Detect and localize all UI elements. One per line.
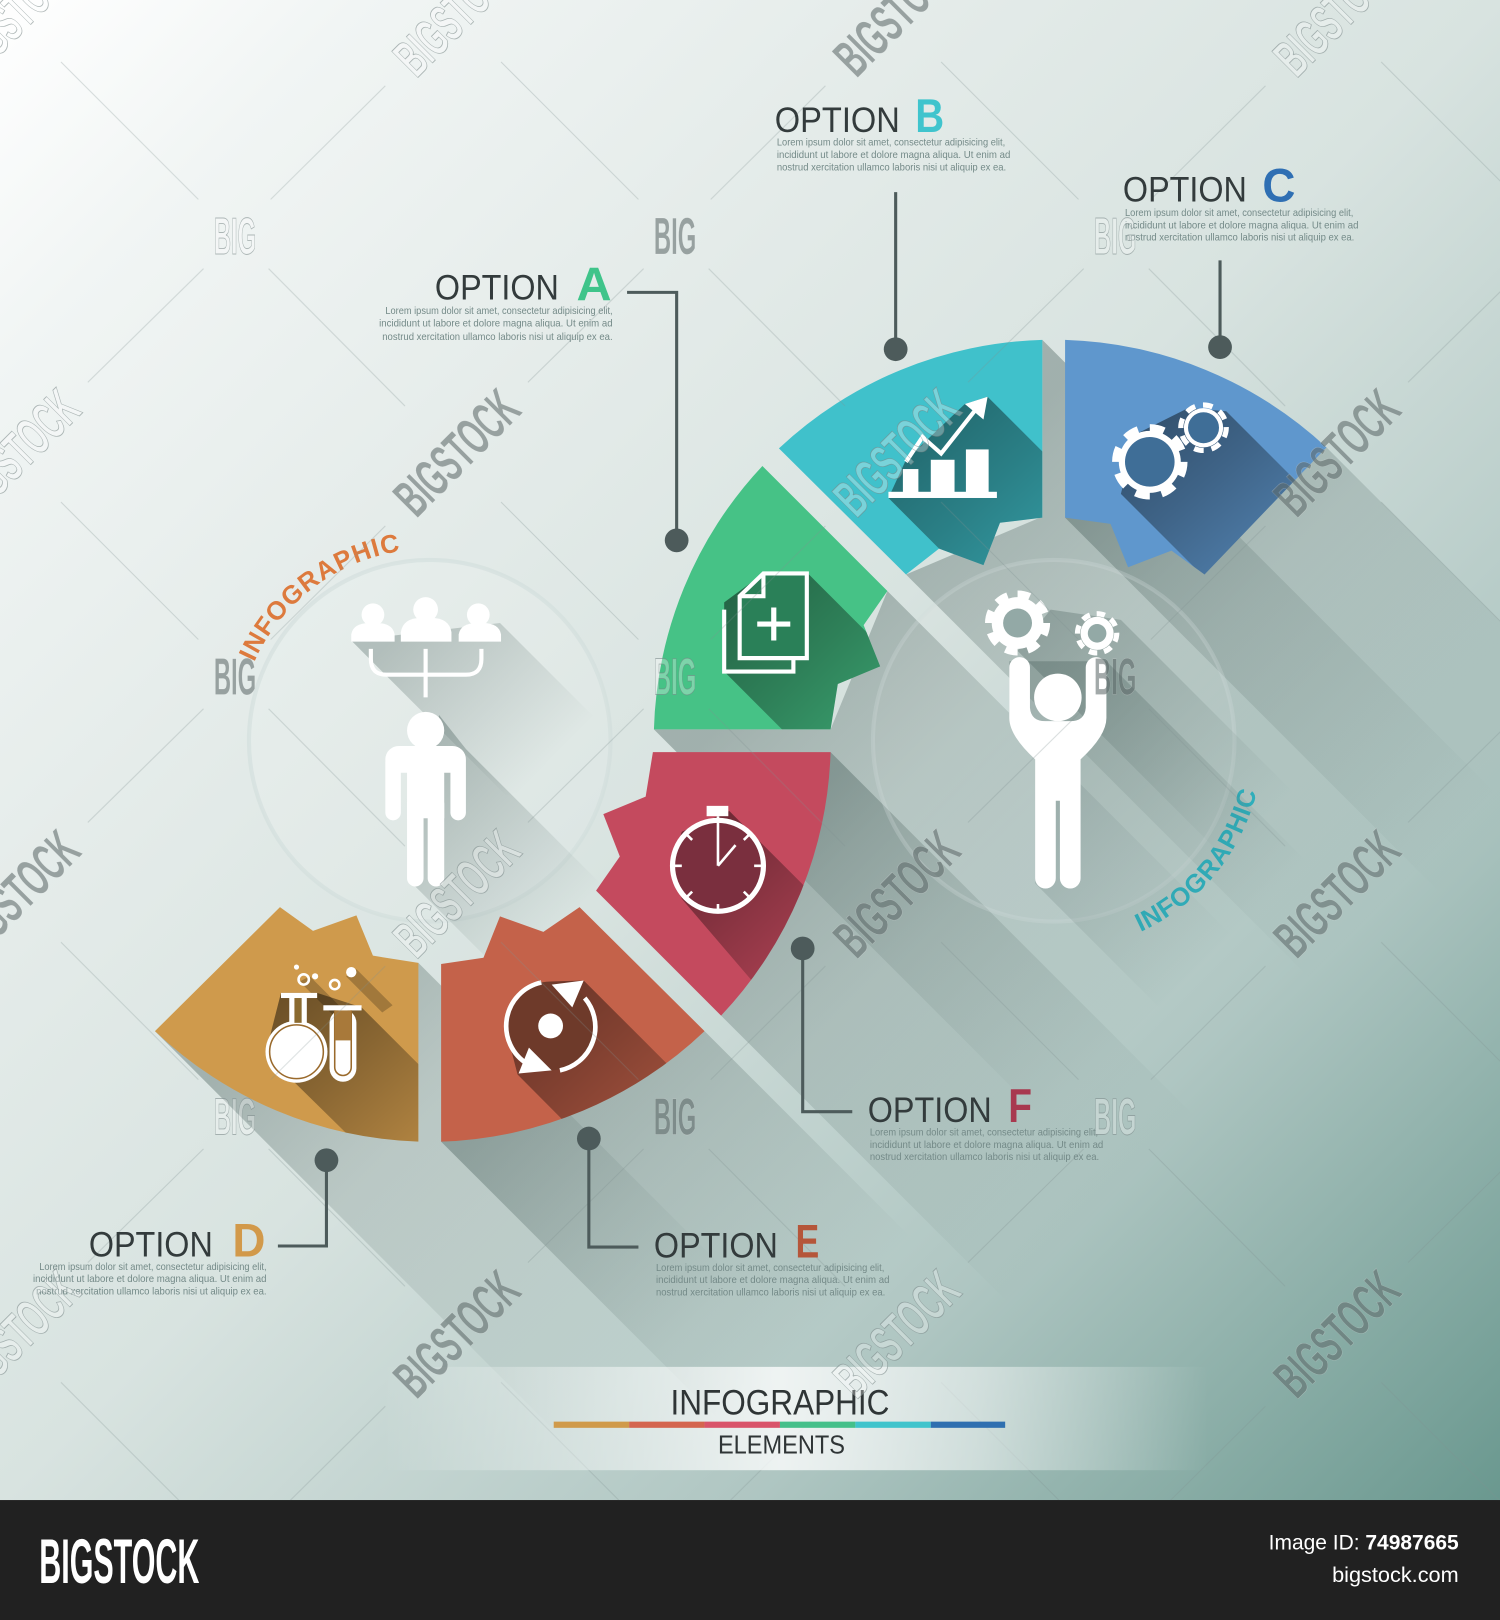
text block: option E: incididunt ut labore et dolore magna aliqua. Ut enim ad bbox=[656, 1275, 889, 1286]
small watermarks: BIG bbox=[214, 1087, 256, 1145]
text block: option B bbox=[775, 90, 1010, 173]
text block: option D bbox=[33, 1214, 267, 1298]
footer bar: bigstock.com bbox=[1332, 1562, 1459, 1587]
watermarks: BIGSTOCK bbox=[1263, 819, 1412, 969]
footer bar bbox=[0, 1500, 1500, 1620]
curved label: right infographic: INFOGRAPHIC bbox=[1134, 789, 1256, 932]
title band bbox=[382, 1367, 1209, 1470]
text block: option C: OPTION bbox=[1123, 170, 1247, 209]
watermarks: BIGSTOCK bbox=[823, 1260, 972, 1409]
connector C bbox=[1208, 260, 1232, 359]
text block: option B: B bbox=[915, 90, 944, 143]
small watermarks: BIG bbox=[654, 207, 696, 265]
connector E bbox=[577, 1127, 638, 1247]
watermarks: BIGSTOCK bbox=[1263, 1260, 1412, 1409]
text block: option E bbox=[654, 1215, 889, 1299]
text block: option E: nostrud xercitation ullamco laboris nisi ut aliquip ex ea. bbox=[656, 1288, 885, 1299]
text block: option E: Lorem ipsum dolor sit amet, consectetur adipisicing elit, bbox=[656, 1263, 884, 1274]
text: BIG bbox=[1094, 1087, 1136, 1145]
text block: option D: OPTION bbox=[89, 1225, 213, 1264]
text block: option C: Lorem ipsum dolor sit amet, consectetur adipisicing elit, bbox=[1125, 208, 1353, 219]
title bbox=[554, 1383, 1005, 1460]
small watermarks: BIG bbox=[654, 1087, 696, 1145]
text block: option C: C bbox=[1262, 159, 1295, 212]
text block: option F: Lorem ipsum dolor sit amet, consectetur adipisicing elit, bbox=[870, 1127, 1098, 1138]
text block: option E: E bbox=[795, 1215, 819, 1268]
figure: person with gears, right bbox=[989, 594, 1334, 1016]
text block: option D: incididunt ut labore et dolore magna aliqua. Ut enim ad bbox=[33, 1274, 267, 1285]
small watermarks: BIG bbox=[214, 207, 256, 265]
text block: option C: nostrud xercitation ullamco laboris nisi ut aliquip ex ea. bbox=[1125, 233, 1354, 244]
text block: option F: OPTION bbox=[868, 1091, 992, 1130]
footer bar: BIGSTOCK bbox=[39, 1527, 199, 1597]
segment A: green with document icon bbox=[654, 466, 888, 730]
text block: option B: nostrud xercitation ullamco laboris nisi ut aliquip ex ea. bbox=[777, 162, 1006, 173]
text block: option C: incididunt ut labore et dolore magna aliqua. Ut enim ad bbox=[1125, 220, 1358, 231]
text block: option A: incididunt ut labore et dolore magna aliqua. Ut enim ad bbox=[379, 318, 613, 329]
connector B bbox=[884, 192, 908, 361]
watermarks: BIGSTOCK bbox=[382, 1260, 532, 1409]
small watermarks: BIG bbox=[654, 647, 696, 705]
connector A bbox=[627, 292, 689, 552]
watermarks: BIGSTOCK bbox=[823, 378, 972, 527]
curved label: left infographic: INFOGRAPHIC bbox=[238, 534, 399, 661]
text block: option D: D bbox=[232, 1214, 265, 1267]
text block: option B: OPTION bbox=[775, 101, 900, 140]
watermarks: BIGSTOCK bbox=[382, 819, 532, 969]
figure: team and person, left bbox=[351, 597, 640, 1008]
connector D bbox=[278, 1148, 338, 1246]
text block: option B: incididunt ut labore et dolore magna aliqua. Ut enim ad bbox=[777, 150, 1010, 161]
text block: option B: Lorem ipsum dolor sit amet, consectetur adipisicing elit, bbox=[777, 138, 1005, 149]
text block: option F: incididunt ut labore et dolore magna aliqua. Ut enim ad bbox=[870, 1140, 1103, 1151]
text block: option A: OPTION bbox=[435, 269, 559, 308]
text block: option C bbox=[1123, 159, 1358, 244]
title: ELEMENTS bbox=[718, 1432, 845, 1460]
small watermarks bbox=[214, 207, 1136, 1145]
segment B: teal with chart icon bbox=[779, 340, 1042, 574]
text block: option D: nostrud xercitation ullamco laboris nisi ut aliquip ex ea. bbox=[36, 1287, 267, 1298]
text block: option A bbox=[379, 259, 613, 343]
segment D: gold with lab flask icon bbox=[155, 907, 418, 1142]
text block: option F: nostrud xercitation ullamco laboris nisi ut aliquip ex ea. bbox=[870, 1152, 1099, 1163]
segment C: blue with gears icon bbox=[1065, 340, 1326, 574]
text: BIG bbox=[1094, 647, 1136, 705]
watermarks: BIGSTOCK bbox=[382, 378, 532, 527]
text block: option A: A bbox=[576, 259, 612, 312]
text block: option F bbox=[868, 1080, 1103, 1163]
text: BIG bbox=[1094, 207, 1136, 265]
text block: option E: OPTION bbox=[654, 1226, 778, 1265]
segment F: red with stopwatch icon bbox=[596, 752, 831, 1016]
connector F bbox=[791, 937, 852, 1112]
long shadows of the arc segments bbox=[155, 340, 1500, 1444]
text block: option D: Lorem ipsum dolor sit amet, consectetur adipisicing elit, bbox=[39, 1262, 267, 1273]
footer bar: Image ID: 74987665 bbox=[1269, 1532, 1459, 1555]
text block: option A: nostrud xercitation ullamco laboris nisi ut aliquip ex ea. bbox=[382, 332, 613, 343]
circle: right bbox=[873, 560, 1235, 922]
small watermarks: BIG bbox=[214, 647, 256, 705]
text block: option F: F bbox=[1008, 1080, 1032, 1133]
text block: option A: Lorem ipsum dolor sit amet, consectetur adipisicing elit, bbox=[385, 306, 613, 317]
watermarks: BIGSTOCK bbox=[823, 819, 972, 969]
circle: left bbox=[249, 560, 611, 922]
title: INFOGRAPHIC bbox=[670, 1383, 889, 1422]
segment E: orange-red with refresh icon bbox=[441, 907, 704, 1142]
watermarks: BIGSTOCK bbox=[1263, 378, 1412, 527]
